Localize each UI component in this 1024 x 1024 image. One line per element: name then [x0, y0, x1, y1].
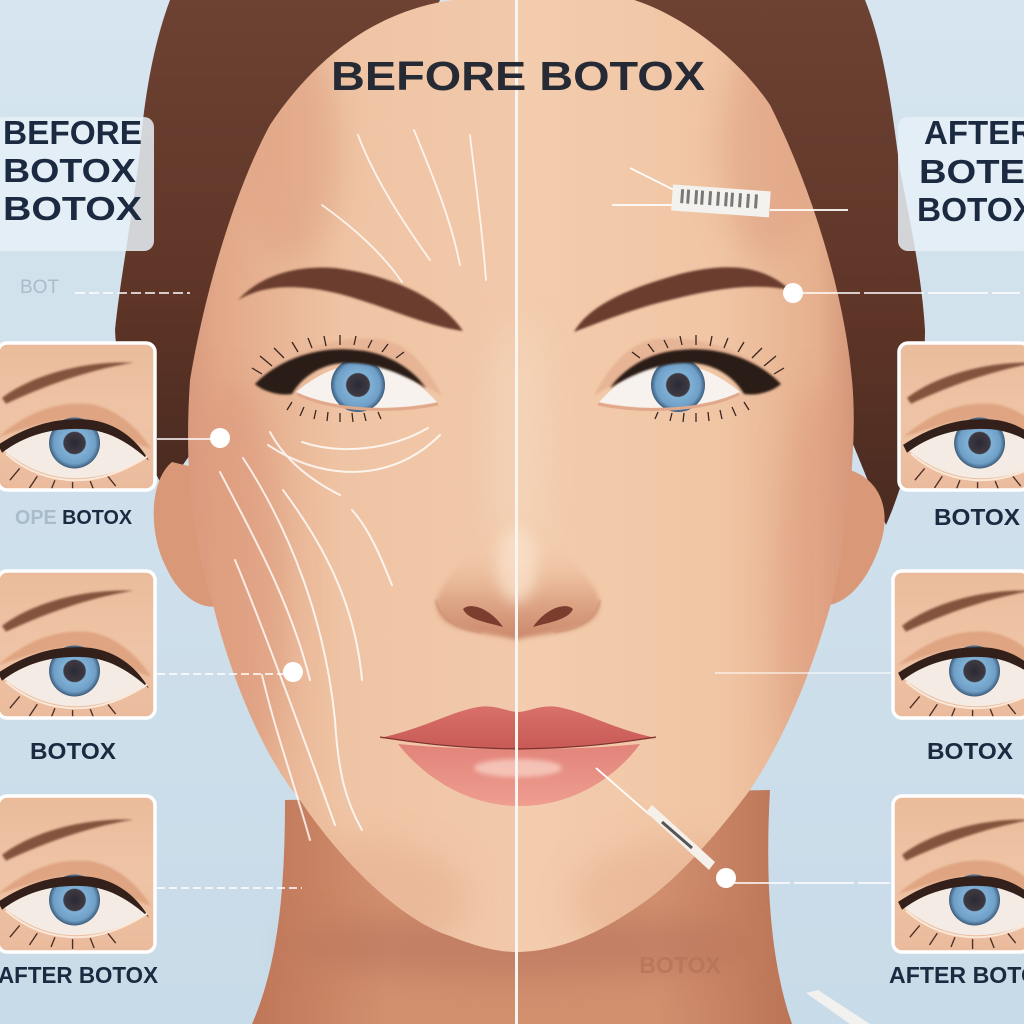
panel: top left label: BEFORE — [3, 114, 142, 151]
label: right thumbnail 1: BOTOX — [934, 504, 1021, 530]
neck shadow — [290, 911, 750, 979]
center divider — [515, 0, 518, 1024]
syringe: forehead — [612, 168, 848, 217]
syringe: chin — [596, 768, 715, 870]
panel: left eye thumbnail 3 — [0, 794, 157, 954]
lips — [380, 706, 656, 806]
panel: top right label — [898, 114, 1024, 251]
heading: BEFORE BOTOX — [331, 53, 705, 99]
panel: top left label: BOTOX — [3, 152, 136, 189]
panel: right eye thumbnail 2 — [891, 569, 1024, 720]
callout: marker left eye — [157, 428, 230, 448]
eyebrow: right — [574, 267, 790, 332]
panel: left eye thumbnail 2 — [0, 569, 157, 720]
callout: line left bottom — [157, 887, 302, 889]
panel: left eye thumbnail 1 — [0, 333, 214, 510]
syringe: bottom corner — [806, 990, 870, 1024]
eye: right — [594, 335, 784, 422]
eyebrow: left — [238, 268, 463, 331]
wrinkle lines: cheek and under eye — [220, 428, 440, 840]
neck — [252, 790, 792, 1024]
ear: right — [822, 470, 885, 606]
panel: top right label: BOTE' — [919, 153, 1024, 190]
face — [170, 0, 862, 960]
callout: marker brow right — [783, 283, 1020, 303]
callout: marker chin — [716, 868, 890, 888]
panel: top left label — [0, 114, 154, 251]
ear: left — [154, 462, 218, 607]
callout: marker left cheek — [157, 662, 303, 682]
faded watermark label: BOTOX — [639, 952, 721, 978]
hair — [115, 0, 925, 525]
panel: right eye thumbnail 3 — [891, 794, 1024, 954]
label: left thumbnail 1: OPE BOTOX — [15, 507, 133, 529]
label: right thumbnail 2: BOTOX — [927, 738, 1014, 764]
label: left thumbnail 3: AFTER BOTOX — [0, 962, 159, 988]
callout: line right cheek — [715, 672, 891, 674]
cheek and jaw shading — [188, 64, 830, 934]
eye: left — [252, 335, 442, 422]
label: left thumbnail 2: BOTOX — [30, 738, 117, 764]
wrinkle lines: forehead — [322, 130, 486, 282]
panel: right eye thumbnail 1 — [897, 341, 1024, 492]
panel: top left label: BOTOX — [3, 190, 142, 227]
nose — [436, 527, 600, 640]
callout: faded label left: BOT — [20, 277, 59, 298]
